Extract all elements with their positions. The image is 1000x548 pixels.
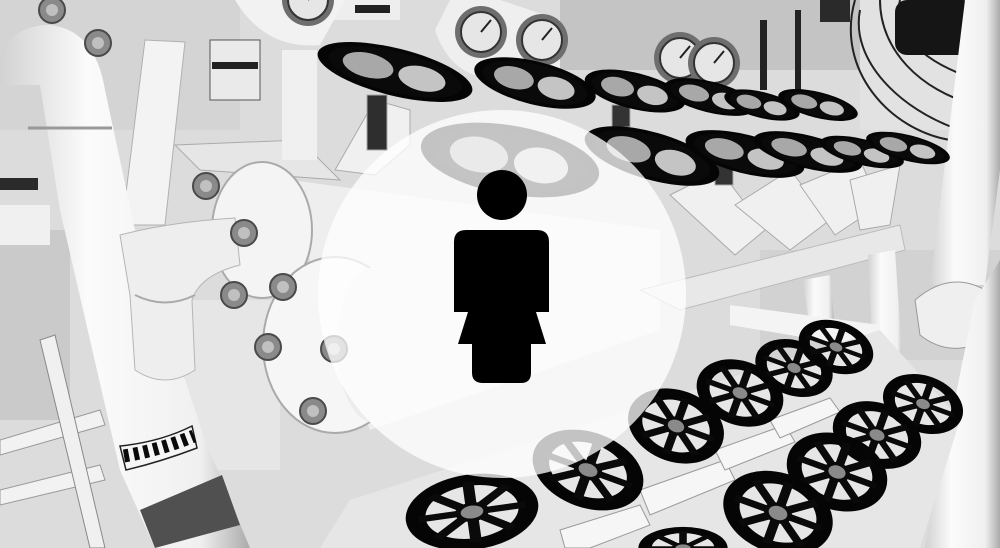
label plates xyxy=(560,398,840,548)
valve bodies and stems xyxy=(335,95,900,255)
flanges xyxy=(212,162,413,433)
translucent white circle xyxy=(318,110,686,478)
upper row handwheels xyxy=(318,33,950,206)
lower row handwheels xyxy=(411,315,964,548)
large vertical white pipe xyxy=(0,25,250,548)
right side pipes xyxy=(915,0,1000,548)
flange bolts xyxy=(39,0,347,424)
elbow pipe xyxy=(120,218,240,380)
lower panel xyxy=(320,330,960,548)
pressure gauges xyxy=(235,0,740,160)
icon: person xyxy=(454,170,549,383)
valve manifold body and header pipe xyxy=(175,140,905,430)
second vertical pipe xyxy=(122,40,185,225)
